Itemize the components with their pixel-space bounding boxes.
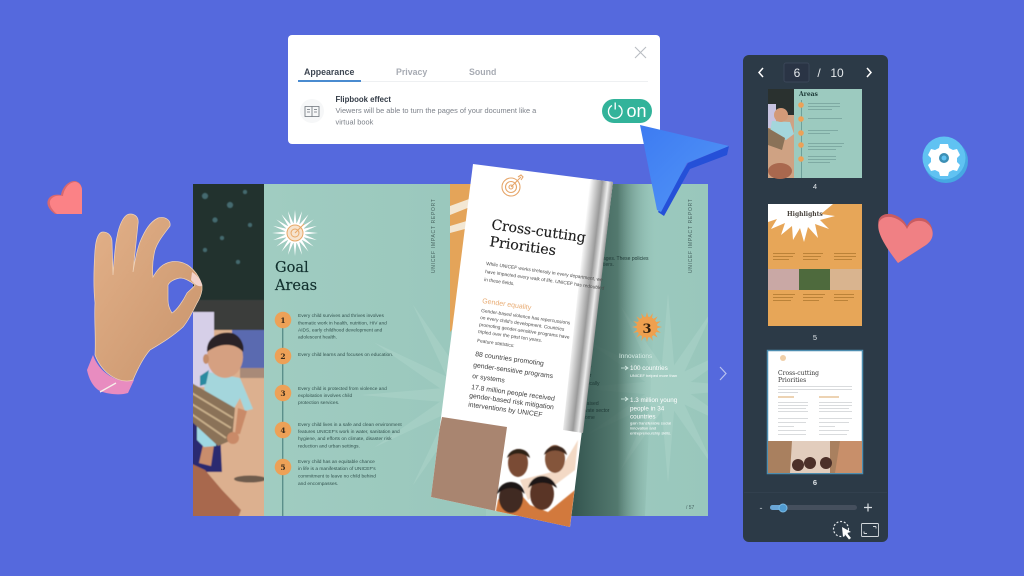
baby shirt bbox=[204, 372, 253, 412]
timeline list: Every child survives and thrives involves bbox=[298, 313, 384, 319]
page fold highlight bbox=[563, 179, 613, 433]
partly hidden text: tiers. bbox=[603, 262, 614, 268]
innovations list: 1.3 million young bbox=[630, 397, 678, 404]
innovations list: entrepreneurship skills. bbox=[630, 430, 671, 436]
tabs: Privacy bbox=[396, 67, 427, 77]
adult clothing bbox=[193, 422, 222, 473]
option text: Flipbook effect bbox=[336, 95, 391, 104]
pager: / bbox=[817, 66, 821, 80]
timeline list: 3 bbox=[280, 389, 286, 398]
timeline list: 4 bbox=[280, 426, 286, 435]
target icon bbox=[502, 175, 523, 196]
innovations list bbox=[619, 353, 678, 436]
timeline list: 5 bbox=[280, 463, 286, 472]
timeline list bbox=[275, 312, 402, 516]
thumbnail page 6: 6 bbox=[813, 478, 817, 487]
partly hidden text bbox=[585, 256, 649, 421]
close icon bbox=[635, 47, 646, 58]
partly hidden text: raised bbox=[585, 401, 599, 407]
thumbnail page 5: Highlights bbox=[787, 211, 823, 218]
innovations list: innovation and bbox=[630, 426, 656, 430]
right page: Innovations bbox=[450, 184, 708, 516]
timeline list: protection services. bbox=[298, 400, 339, 406]
intro: have impacted every walk of life. UNICEF has redoubled bbox=[485, 269, 605, 292]
tabs: Appearance bbox=[304, 67, 354, 77]
timeline list: thematic work in health, nutrition, HIV and bbox=[298, 320, 387, 326]
icon: flipbook bbox=[300, 99, 324, 123]
innovations list: Innovations bbox=[619, 353, 653, 360]
timeline list: 1 bbox=[280, 316, 286, 325]
section body: Feature statistics: bbox=[477, 338, 515, 349]
vertical label: UNICEF IMPACT REPORT bbox=[688, 198, 694, 273]
wristband bbox=[87, 355, 134, 394]
zoom slider: - bbox=[760, 503, 762, 513]
thumbnail page 5: 5 bbox=[813, 333, 817, 342]
timeline list: reduction and urban settings. bbox=[298, 444, 360, 450]
icon: gear bbox=[922, 136, 968, 183]
turning page: Cross-cutting Priorities bbox=[425, 164, 613, 530]
statistics: 88 countries promoting bbox=[475, 351, 544, 368]
timeline list: 2 bbox=[280, 352, 286, 361]
timeline list: Every child lives in a safe and clean environment bbox=[298, 422, 402, 428]
section body: tripled over the past ten years. bbox=[478, 329, 542, 344]
section body: promoting gender-sensitive programs have bbox=[479, 322, 570, 341]
partly hidden text: or bbox=[587, 373, 592, 379]
icon: heart right bbox=[878, 214, 933, 263]
timeline list: adolescent health. bbox=[298, 334, 337, 340]
badge: 3: 3 bbox=[642, 322, 652, 337]
sling bbox=[190, 382, 235, 446]
adult arm bbox=[190, 463, 241, 518]
page number: / 57 bbox=[686, 505, 695, 511]
section body: on every child's development. Countries bbox=[480, 315, 565, 333]
pager: 6 bbox=[794, 66, 801, 80]
timeline list: Every child learns and focuses on education. bbox=[298, 352, 393, 358]
photo: child carried by adult bbox=[193, 184, 264, 516]
baby lower leg bbox=[199, 445, 214, 466]
tabs bbox=[304, 67, 496, 77]
timeline list: AIDS, early childhood development and bbox=[298, 328, 383, 334]
partly hidden text: vate sector bbox=[585, 408, 610, 414]
timeline list: features UNICEF's work in water, sanitation and bbox=[298, 429, 400, 435]
statistics: interventions by UNICEF bbox=[468, 402, 543, 419]
icon: heart left bbox=[47, 181, 82, 214]
thumbnail page 6: Priorities bbox=[778, 377, 806, 384]
icon: click cursor bbox=[834, 522, 851, 540]
timeline list: exploitation involves child bbox=[298, 393, 352, 399]
innovations list: 100 countries bbox=[630, 365, 668, 372]
pager: 10 bbox=[830, 66, 844, 80]
intro bbox=[484, 261, 605, 292]
timeline list: Every child is protected from violence and bbox=[298, 386, 387, 392]
page navigator panel bbox=[743, 55, 888, 542]
statistics: 17.8 million people received bbox=[471, 384, 555, 403]
thumbnail page 6: Cross-cutting bbox=[778, 370, 819, 377]
timeline list: hygiene, and efforts on climate, disaster risk bbox=[298, 436, 392, 442]
section body bbox=[477, 308, 571, 349]
badge: 3 bbox=[626, 306, 668, 348]
thumbnail page 4: 4 bbox=[813, 182, 817, 191]
heading: Goal Areas: Goal bbox=[275, 260, 309, 276]
settings dialog: Viewers will be able to turn the pages of your document like a bbox=[336, 106, 537, 115]
settings dialog: virtual book bbox=[336, 118, 374, 126]
timeline list: Every child has an equitable chance bbox=[298, 459, 375, 465]
timeline list: in life is a manifestation of UNICEF's bbox=[298, 466, 376, 472]
statistics: gender-sensitive programs bbox=[473, 362, 554, 380]
innovations list: UNICEF helped more than bbox=[630, 373, 677, 378]
statistics: gender-based risk mitigation bbox=[469, 393, 554, 411]
section body: Gender-based violence has repercussions bbox=[481, 308, 571, 327]
decorative starburst bbox=[366, 308, 448, 482]
baby leg bbox=[197, 424, 216, 447]
partly hidden text: ome bbox=[585, 415, 595, 421]
innovations list: people in 34 bbox=[630, 406, 665, 412]
toggle: on bbox=[602, 99, 652, 123]
timeline list: and encompasses. bbox=[298, 481, 338, 487]
heading: Cross-cutting bbox=[490, 217, 587, 246]
thumbnail page 4 bbox=[768, 89, 862, 191]
tabs: Sound bbox=[469, 67, 496, 77]
partly hidden text: ur bbox=[587, 365, 592, 371]
turning page: Cross-cutting Priorities: Priorities bbox=[488, 234, 557, 259]
next page chevron bbox=[720, 367, 726, 380]
photo: children bbox=[431, 417, 578, 527]
thumbnail page 4: Areas bbox=[798, 91, 819, 98]
left page: Goal Areas bbox=[193, 184, 708, 516]
toggle: on: on bbox=[626, 101, 647, 121]
intro: in these fields. bbox=[484, 277, 515, 287]
baby head bbox=[206, 344, 244, 378]
statistics bbox=[468, 351, 555, 419]
thumbnail page 5 bbox=[768, 204, 862, 342]
statistics: or systems bbox=[472, 373, 506, 385]
timeline list: commitment to leave no child behind bbox=[298, 474, 376, 480]
sunburst: target icon bbox=[272, 210, 318, 256]
settings dialog bbox=[288, 35, 660, 144]
innovations list: gain transferable social bbox=[630, 420, 671, 426]
innovations list: countries bbox=[630, 414, 656, 420]
icon: 3D cursor arrow bbox=[640, 125, 729, 216]
pager bbox=[759, 63, 871, 82]
icon: fullscreen bbox=[862, 524, 878, 536]
baby arm bbox=[235, 408, 247, 434]
icon: OK hand bbox=[87, 214, 202, 394]
partly hidden text: ages. These policies bbox=[603, 256, 649, 262]
vertical label: UNICEF IMPACT REPORT bbox=[431, 198, 437, 273]
flipbook spread bbox=[47, 35, 968, 542]
section heading: Gender equality bbox=[482, 298, 532, 312]
intro: While UNICEF works tirelessly in every department, we bbox=[486, 261, 603, 283]
heading: Goal Areas: Areas bbox=[274, 278, 317, 294]
thumbnail page 6 bbox=[768, 350, 862, 487]
zoom slider bbox=[744, 492, 887, 513]
partly hidden text: fically bbox=[587, 381, 600, 387]
